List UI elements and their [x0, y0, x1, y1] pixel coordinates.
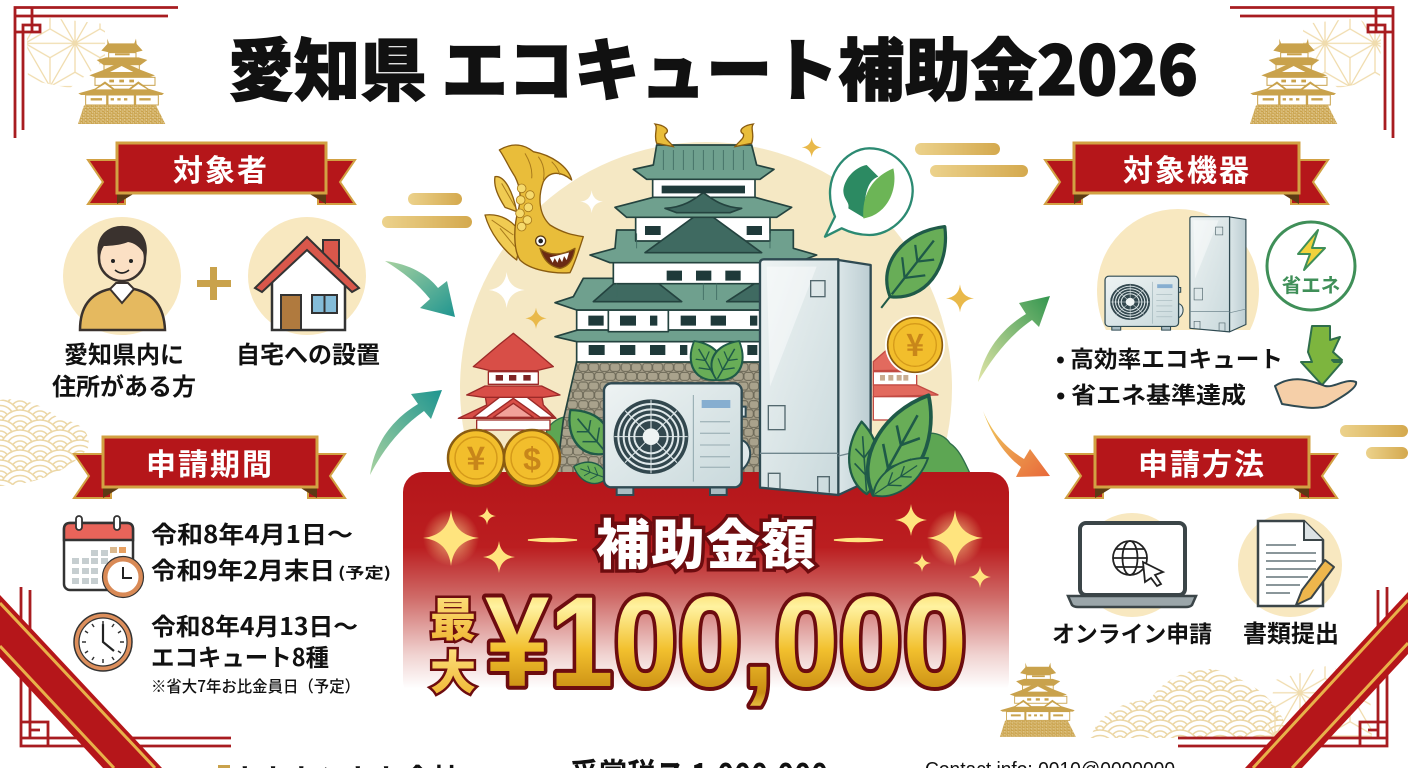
- water heater tank: [760, 259, 871, 495]
- text: period dates: (予定): [338, 562, 391, 583]
- text: period dates: 令和8年4月1日～: [151, 515, 353, 550]
- heading ribbon: application method: [1066, 437, 1337, 498]
- frame: top right corner: [1230, 8, 1393, 138]
- appliances and leaves: [557, 259, 950, 507]
- icon: resident: [63, 217, 181, 335]
- text: equipment list: • 省エネ基準達成: [1056, 376, 1246, 410]
- red pagoda right: [873, 350, 938, 420]
- pattern: seigaiha bottom right: [1090, 669, 1290, 738]
- castle: main keep: [555, 145, 817, 473]
- panel: target equipment: [1045, 143, 1356, 410]
- icon: laptop: [1068, 513, 1196, 617]
- text: resident condition: 住所がある方: [52, 367, 196, 402]
- cloud: gold left of castle: [382, 193, 472, 228]
- heading ribbon: target equipment: [1045, 143, 1328, 204]
- pattern: asanoha bottom right: [1265, 665, 1372, 738]
- sparkles: [489, 137, 974, 329]
- text: second period: ※省大7年お比金員日（予定）: [151, 673, 360, 697]
- big leaf top right: [863, 213, 963, 322]
- pattern: seigaiha left: [0, 399, 89, 486]
- illustration: central scene in front of panel: [448, 259, 950, 507]
- coins: $: [523, 441, 541, 477]
- heading ribbon: application period: 申請期間: [146, 440, 274, 484]
- arrow: teal lower left: [370, 390, 442, 475]
- pattern: asanoha top right: [1303, 18, 1381, 88]
- title: 愛知県 エコキュート補助金2026: [228, 16, 1198, 115]
- text: equipment list: [1056, 340, 1283, 410]
- frame: bottom right corner: [1178, 587, 1387, 746]
- label: maximum: 最: [430, 584, 476, 650]
- ribbon: bottom left: [0, 595, 162, 768]
- icon: plus: [197, 267, 231, 300]
- castle icon: gold top right: [1250, 39, 1337, 124]
- text: equipment list: • 高効率エコキュート: [1056, 340, 1283, 374]
- heading ribbon: application method: 申請方法: [1138, 440, 1266, 484]
- coins: [448, 430, 560, 486]
- frame: top left corner: [15, 8, 178, 138]
- heading ribbon: target people: [88, 143, 355, 204]
- text: home installation: 自宅への設置: [236, 335, 380, 370]
- coins: ¥: [467, 434, 486, 480]
- arrow: orange lower right: [983, 411, 1050, 477]
- right leaves: [846, 383, 950, 507]
- cloud: gold right of castle: [915, 143, 1028, 177]
- icon: small outdoor unit: [1105, 276, 1183, 330]
- icon: small tank: [1190, 217, 1246, 332]
- golden shachi fish: [485, 145, 583, 273]
- text: second period: エコキュート8種: [151, 638, 329, 673]
- text: online application: オンライン申請: [1052, 615, 1212, 649]
- castle: windows: [588, 186, 762, 355]
- red pagoda left: [458, 333, 560, 430]
- panel: target people: [52, 143, 380, 402]
- label: subsidy amount: 補助金額: [596, 501, 816, 580]
- icon: house: [248, 217, 366, 335]
- text: resident condition: 愛知県内に: [64, 335, 184, 370]
- label: maximum: [430, 584, 476, 703]
- speech bubble with leaf: [825, 148, 913, 237]
- icon: document with pencil: [1238, 513, 1342, 617]
- badge: energy saving: [1267, 222, 1355, 310]
- panel: subsidy amount: [403, 472, 1009, 714]
- left leaves: [557, 399, 620, 488]
- panel: application method: [1052, 437, 1342, 649]
- badge: energy saving: 省エネ: [1282, 269, 1340, 298]
- yen coin right: [885, 315, 945, 375]
- backdrop: beige circle: [460, 142, 952, 634]
- text: resident condition: [52, 335, 196, 402]
- yen coin right: ¥: [906, 320, 924, 365]
- frame: bottom left corner: [21, 587, 231, 746]
- icon: calendar with clock: [64, 516, 144, 598]
- sprout leaves: [681, 334, 752, 387]
- text: period dates: 令和9年2月末日: [151, 551, 335, 586]
- bushes: [547, 417, 970, 473]
- heading ribbon: target equipment: 対象機器: [1123, 146, 1251, 190]
- icon: beige backdrop: [1097, 209, 1259, 330]
- heading ribbon: target people: 対象者: [173, 146, 269, 190]
- panel: application period: [64, 437, 391, 697]
- castle icon: gold top left: [78, 39, 165, 124]
- amount: ¥100,000: [485, 571, 967, 714]
- text: paper submission: 書類提出: [1243, 614, 1339, 649]
- icon: hand with arrow: [1275, 326, 1356, 408]
- text: second period: 令和8年4月13日～: [151, 607, 358, 642]
- arrow: teal upper left: [385, 261, 455, 317]
- ribbon: bottom right: [1245, 592, 1408, 768]
- pattern: asanoha top left: [27, 18, 105, 88]
- castle: golden ornaments: [655, 124, 753, 147]
- heading ribbon: application period: [74, 437, 345, 498]
- text: period dates: [151, 515, 391, 586]
- outdoor unit: [604, 383, 750, 495]
- arrow: green upper right: [978, 296, 1050, 382]
- icon: clock: [74, 613, 132, 671]
- label: maximum: 大: [430, 637, 476, 703]
- cloud: gold far right: [1340, 425, 1408, 459]
- castle icon: gold bottom: [1000, 663, 1076, 737]
- castle: roof tile lines: [617, 150, 770, 300]
- sparkles on panel: [423, 504, 991, 588]
- background red panel: [403, 472, 1009, 700]
- illustration: central scene behind panel: [458, 124, 974, 634]
- text: second period: [151, 607, 360, 697]
- scene drawn at 3x from origin 450,120: [458, 124, 974, 473]
